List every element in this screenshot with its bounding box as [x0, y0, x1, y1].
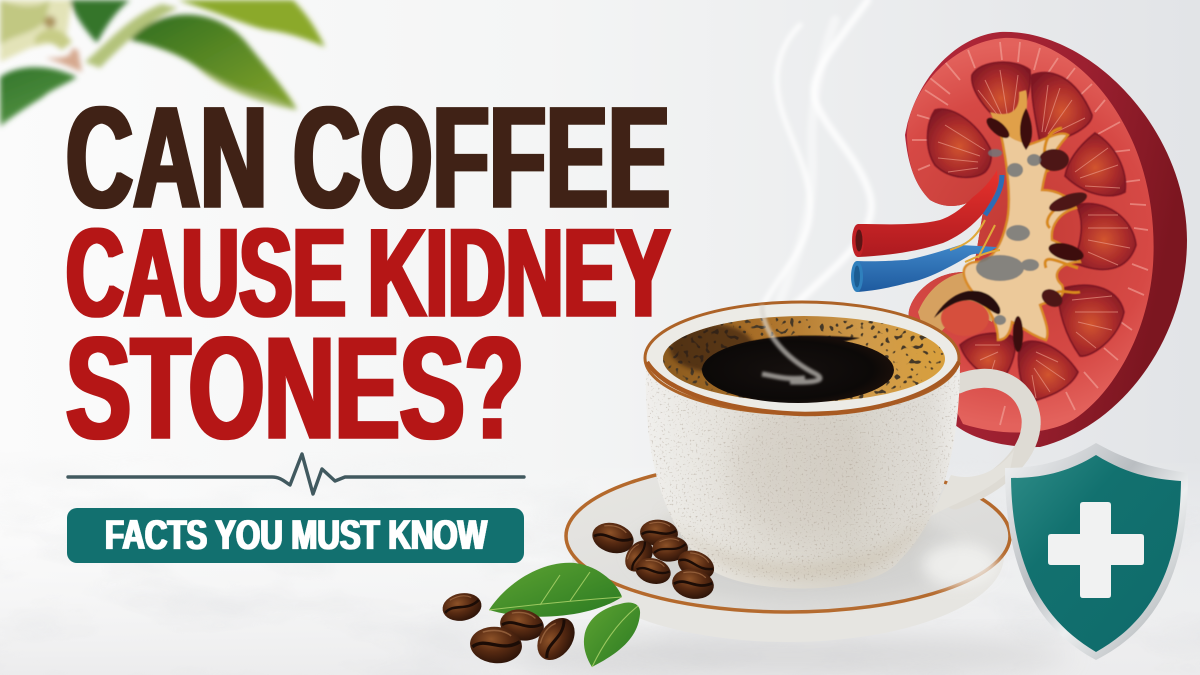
- steam rising from the cup: [763, 0, 871, 305]
- icon: medical shield: [1005, 443, 1188, 660]
- renal vein: [857, 245, 997, 292]
- heading: STONES?: STONES?: [66, 307, 524, 469]
- illustration: kidney cross-section: [851, 30, 1187, 450]
- loose coffee beans on the table: [440, 590, 582, 667]
- blurred green leaves, top left: [0, 0, 325, 127]
- steam over the coffee: [762, 305, 820, 382]
- renal sinus and calyces: [934, 90, 1089, 352]
- kidney outer capsule: [905, 32, 1187, 447]
- pyramid striations: [938, 70, 1130, 398]
- white medical cross: [1048, 502, 1144, 598]
- kidney cortex face: [907, 38, 1154, 432]
- cup rim: [645, 302, 959, 414]
- renal artery: [858, 170, 998, 257]
- coffee leaves on the table: [489, 563, 640, 667]
- banner: facts you must know: FACTS YOU MUST KNOW: [105, 511, 487, 558]
- coffee crema and surface: [663, 316, 945, 402]
- heading: CAUSE KIDNEY: CAUSE KIDNEY: [66, 204, 670, 343]
- coffee beans on saucer: [589, 518, 719, 602]
- banner: facts you must know: [67, 508, 524, 563]
- heading: CAN COFFEE: CAN COFFEE: [66, 77, 670, 238]
- cup body: [646, 362, 960, 589]
- illustration: white coffee cup: [640, 302, 965, 600]
- heartbeat divider line: [68, 454, 524, 494]
- rim lower edge: [647, 362, 959, 414]
- illustration: coffee saucer: [566, 460, 1010, 642]
- kidney pyramids (lobes): [928, 62, 1136, 402]
- illustration: cup handle: [931, 378, 1031, 516]
